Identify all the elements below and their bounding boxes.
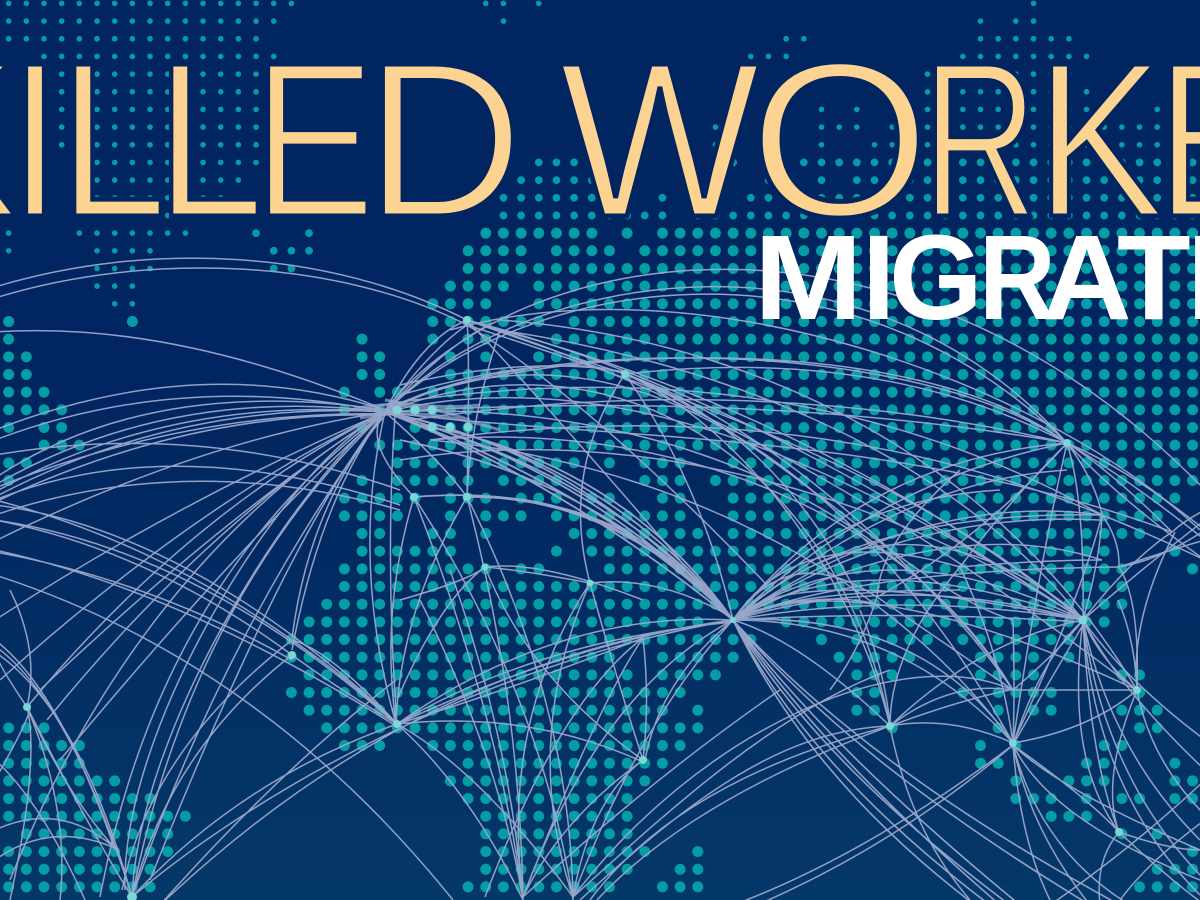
title: skilled workers: D <box>364 16 524 263</box>
arcs: south-east fans <box>1013 443 1200 900</box>
title: skilled workers: L <box>58 16 168 263</box>
arcs: south-east bundle <box>733 620 1120 900</box>
arcs: western lower crossings <box>0 500 453 900</box>
subtitle: migration: T <box>1117 210 1191 345</box>
title: skilled workers: K <box>1035 16 1165 263</box>
migration arcs <box>0 258 1200 900</box>
title: skilled workers: I <box>8 16 62 263</box>
subtitle: migration: G <box>889 210 983 345</box>
arcs: rising from south Atlantic to Asia <box>523 670 1013 900</box>
subtitle: migration: A <box>1042 210 1132 345</box>
arcs: eastern edge <box>1067 443 1200 690</box>
dots: upper middle rows <box>256 162 1193 268</box>
arcs: Asia hubs <box>860 443 1137 900</box>
dots: central rows <box>9 233 1193 587</box>
arcs: mesh over Asia <box>500 330 1102 897</box>
subtitle: migration: I <box>862 210 896 345</box>
arcs: hub to Africa bundle <box>385 412 733 620</box>
subtitle: migration: M <box>754 210 863 345</box>
arcs: southern Atlantic fans <box>397 497 733 900</box>
title: skilled workers: R <box>922 16 1038 263</box>
arcs: Americas and Atlantic verticals <box>132 412 733 900</box>
dots: southern rows <box>9 604 1193 887</box>
subtitle: migration: R <box>979 210 1056 345</box>
title: skilled workers: L <box>155 16 265 263</box>
arcs: hub to Asia crossings <box>385 310 1200 743</box>
title: skilled workers: E <box>253 16 376 263</box>
arcs: hub core <box>350 400 500 430</box>
title: skilled workers: W <box>559 16 761 263</box>
arcs: band through mid-Atlantic node <box>380 358 1172 726</box>
arcs: top long-haul sweep <box>0 258 1200 585</box>
dots: northern rows <box>9 3 1175 304</box>
arcs: Africa hub to Asia <box>733 443 1137 726</box>
arcs: European hub to the west <box>0 331 400 897</box>
hub nodes <box>23 316 1141 900</box>
title: skilled workers: O <box>749 16 931 263</box>
